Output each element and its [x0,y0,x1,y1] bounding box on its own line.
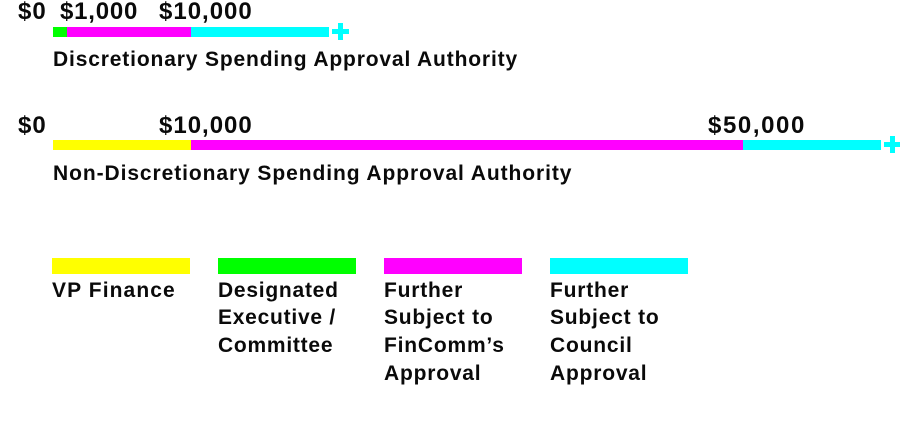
legend item: Designated Executive / Committee [218,258,356,357]
text: Further Subject to FinComm's Approval: Subject to [384,306,494,329]
text: Further Subject to Council Approval: Council [550,334,633,357]
label: $50,000: $50,000 [708,112,806,139]
text: Further Subject to FinComm's Approval: FinComm’s [384,334,505,357]
legend item: VP Finance [52,258,190,302]
text: Further Subject to FinComm's Approval [384,278,505,385]
icon: plus [332,23,349,40]
chart: non-discretionary spending approval authority [18,112,900,185]
text: Further Subject to FinComm's Approval: Approval [384,362,481,385]
text: Designated Executive / Committee: Designated [218,278,339,302]
segment: VP finance [53,140,191,150]
heading: discretionary: Discretionary Spending Approval Authority [53,48,518,71]
segment: designated executive [53,27,67,36]
text: Further Subject to FinComm's Approval: Further [384,278,463,302]
swatch: cyan [550,258,688,274]
segment: council approval [191,27,329,36]
text: Further Subject to Council Approval: Further [550,278,629,302]
label: $10,000: $10,000 [159,112,253,139]
text: Further Subject to Council Approval: Approval [550,362,647,385]
legend item: Further Subject to Council Approval [550,258,688,385]
swatch: magenta [384,258,522,274]
text: Designated Executive / Committee: Committee [218,334,333,357]
heading: non-discretionary: Non-Discretionary Spending Approval Authority [53,162,572,185]
legend item: Further Subject to FinComm's Approval [384,258,522,385]
segment: council approval [743,140,881,150]
icon: plus [884,136,900,153]
legend [52,258,688,385]
text: Designated Executive / Committee [218,278,339,357]
segment: FinComm approval [191,140,743,150]
swatch: green [218,258,356,274]
text: Further Subject to Council Approval: Subject to [550,306,660,329]
segment: FinComm approval [67,27,191,36]
text: Further Subject to Council Approval [550,278,660,385]
chart: discretionary spending approval authority [18,0,518,71]
text: VP Finance: VP Finance [52,278,176,302]
text: Designated Executive / Committee: Executive / [218,306,336,329]
label: $0: $0 [18,112,47,139]
swatch: yellow [52,258,190,274]
